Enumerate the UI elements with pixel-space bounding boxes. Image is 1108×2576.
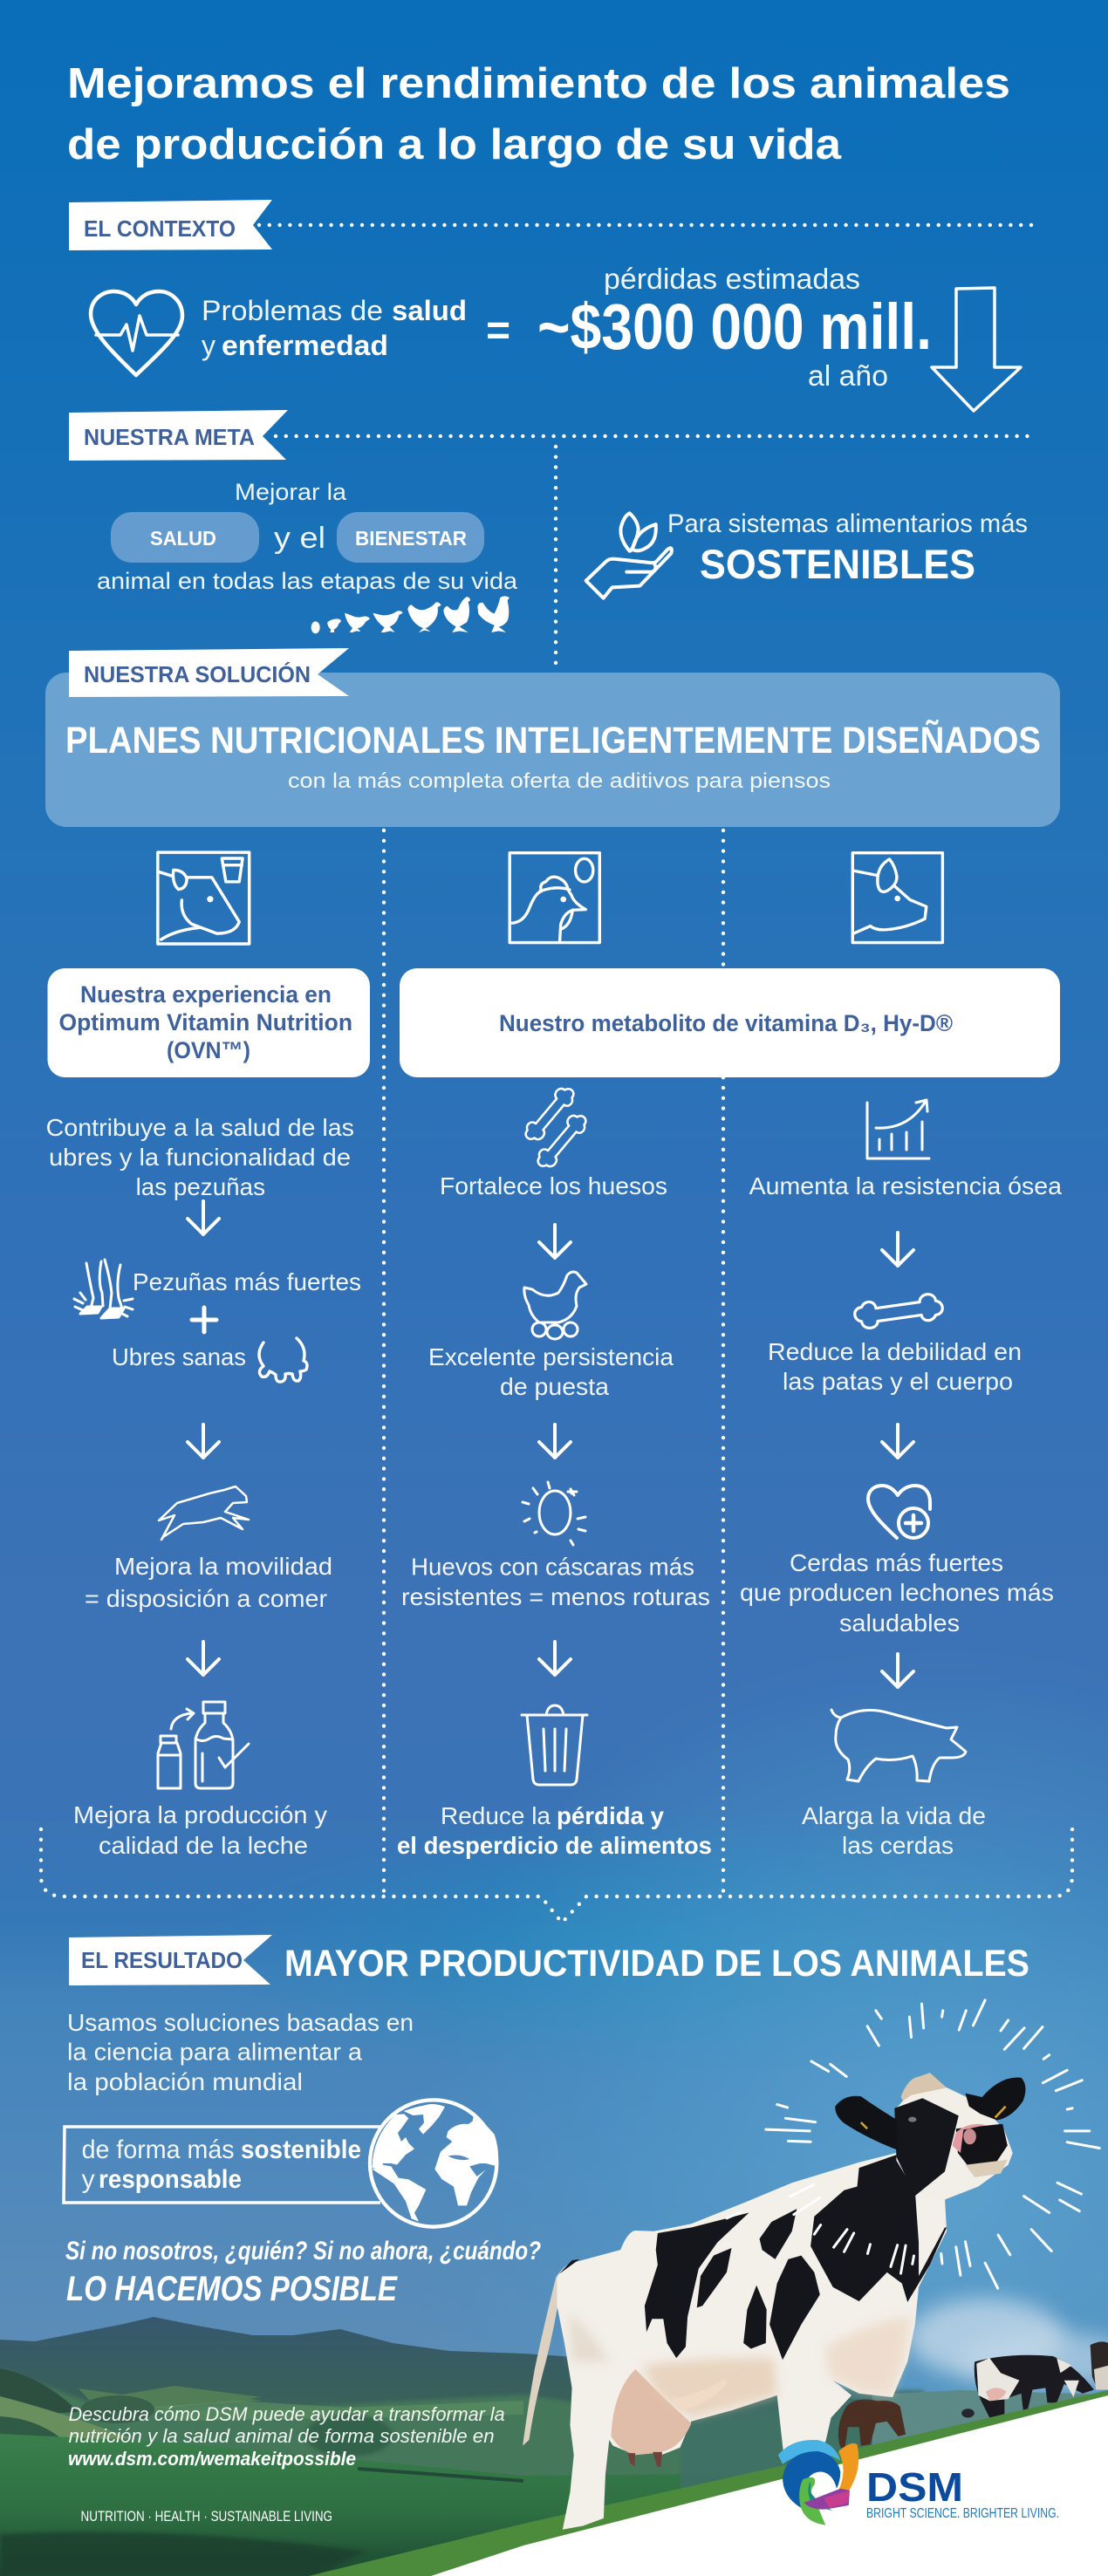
text: descubra: Descubra cómo DSM puede ayudar a transformar la	[69, 2403, 505, 2425]
text: debilidad: las patas y el cuerpo	[783, 1368, 1013, 1395]
arrow	[539, 1642, 571, 1675]
ribbon: nuestra solución: NUESTRA SOLUCIÓN	[84, 661, 311, 687]
DSM logo	[778, 2440, 1059, 2525]
text: reduce la pérdida	[397, 1802, 712, 1859]
text: y el: y el	[274, 522, 325, 555]
title: Mejoramos el rendimiento de los animales	[67, 60, 1010, 107]
section: el resultado	[64, 1935, 1029, 2525]
text: movilidad: Mejora la movilidad	[114, 1553, 332, 1580]
text: huevos: resistentes = menos roturas	[401, 1583, 710, 1610]
cow black patches	[559, 2155, 947, 2360]
icon: cow box	[158, 852, 250, 944]
cow face patch	[894, 2098, 959, 2196]
icon: chicken growth stages	[311, 596, 510, 633]
ribbon: nuestra meta: NUESTRA META	[84, 426, 255, 450]
text: huevos	[401, 1554, 710, 1610]
column 3: pig pathway	[740, 1100, 1062, 1859]
text: mejora la producción: calidad de la leche	[99, 1832, 308, 1859]
icon: milk bottles	[158, 1702, 249, 1788]
text: contribuye: las pezuñas	[136, 1173, 265, 1200]
section: nuestra meta	[69, 410, 1036, 672]
equals: =	[486, 308, 510, 354]
callout: sostenible y responsable: sostenible	[241, 2135, 361, 2164]
ribbon: el resultado: EL RESULTADO	[81, 1949, 243, 1973]
logo tagline: BRIGHT SCIENCE. BRIGHTER LIVING.	[866, 2506, 1059, 2521]
arrow	[188, 1642, 219, 1675]
arrow	[188, 1425, 219, 1458]
text: aumenta: Aumenta la resistencia ósea	[749, 1172, 1062, 1199]
text: alarga: las cerdas	[842, 1832, 954, 1859]
cow tail	[523, 2276, 561, 2446]
white corner	[431, 2395, 1108, 2576]
ribbon: nuestra meta	[69, 410, 288, 461]
arrow	[882, 1654, 913, 1687]
text: usamos soluciones: la ciencia para alimentar a	[67, 2038, 362, 2066]
text: alarga: Alarga la vida de	[802, 1802, 986, 1829]
title: de producción a lo largo de su vida	[67, 121, 842, 168]
icon: hooves	[74, 1260, 133, 1318]
icon: udder	[259, 1338, 307, 1382]
text: problemas de salud: y	[202, 330, 215, 361]
cow right ear	[965, 2077, 1025, 2120]
section: el contexto	[69, 200, 1036, 411]
text: animal en todas las etapas: animal en todas las etapas de su vida	[97, 568, 518, 594]
arrow: large down	[932, 288, 1021, 411]
text: mejora la producción	[73, 1801, 327, 1859]
pill: salud: SALUD	[150, 527, 216, 550]
ribbon: el contexto	[69, 200, 272, 250]
icon: growth chart	[867, 1100, 929, 1158]
pill: bienestar: BIENESTAR	[355, 527, 467, 550]
column 2: hen pathway	[397, 1083, 712, 1859]
sky tint	[393, 1640, 1108, 2425]
text: descubra	[68, 2403, 505, 2470]
text: persistencia	[428, 1343, 674, 1400]
box: ovn: Optimum Vitamin Nutrition	[59, 1009, 352, 1035]
text: lo hacemos posible: LO HACEMOS POSIBLE	[66, 2270, 398, 2308]
arrow	[539, 1425, 571, 1458]
text: cerdas	[740, 1549, 1054, 1636]
box: hy-d: Nuestro metabolito de vitamina D₃, Hy-D®	[499, 1010, 953, 1036]
panel: planes nutricionales	[45, 673, 1060, 827]
cow tuft	[901, 2073, 947, 2101]
box: ovn: Nuestra experiencia en	[80, 981, 332, 1008]
text: huevos: Huevos con cáscaras más	[411, 1554, 694, 1581]
arrow	[539, 1225, 571, 1258]
text: reduce la pérdida: el desperdicio de alimentos	[397, 1832, 712, 1859]
dotted bracket	[41, 1829, 1072, 1923]
text: problemas de salud: salud	[392, 295, 467, 326]
text: alarga	[802, 1802, 986, 1859]
text: usamos soluciones: Usamos soluciones basadas en	[67, 2009, 414, 2036]
text: contribuye: ubres y la funcionalidad de	[49, 1144, 351, 1171]
callout: sostenible y responsable: y	[82, 2165, 95, 2194]
text: movilidad: = disposición a comer	[85, 1585, 327, 1612]
text: problemas de salud: enfermedad	[222, 330, 388, 361]
heading: mayor productividad: MAYOR PRODUCTIVIDAD DE LOS ANIMALES	[284, 1943, 1029, 1985]
callout: sostenible y responsable: de forma más	[82, 2135, 235, 2164]
text: contribuye: Contribuye a la salud de las	[46, 1114, 354, 1141]
text: reduce la pérdida: pérdida y	[557, 1802, 664, 1829]
text: usamos soluciones	[67, 2009, 414, 2095]
text: mejorar la: Mejorar la	[235, 479, 347, 505]
icon: trash can	[522, 1705, 587, 1785]
ribbon: el contexto: EL CONTEXTO	[84, 217, 236, 242]
ribbon: nuestra solución	[69, 648, 349, 697]
subheading: aditivos: con la más completa oferta de aditivos para piensos	[288, 769, 831, 793]
icon: hen box	[510, 853, 599, 943]
pill: bienestar	[337, 512, 484, 563]
text: ubres: Ubres sanas	[112, 1343, 246, 1370]
text: sostenibles: SOSTENIBLES	[700, 541, 975, 587]
text: mejora la producción: Mejora la producción y	[73, 1801, 327, 1828]
icon: hand with leaves	[586, 513, 672, 598]
ribbon: el resultado	[69, 1935, 272, 1985]
arrow	[882, 1233, 913, 1266]
background glow	[174, 1788, 1108, 2120]
text: cerdas: que producen lechones más	[740, 1579, 1054, 1606]
foreground grass strip	[309, 2390, 1108, 2576]
text: pezuñas: Pezuñas más fuertes	[133, 1268, 361, 1295]
cow body	[557, 2153, 947, 2530]
text: persistencia: Excelente persistencia	[428, 1343, 674, 1370]
text: problemas de salud	[202, 295, 467, 361]
text: debilidad	[768, 1338, 1022, 1395]
box: ovn	[47, 968, 370, 1077]
icon: bones	[521, 1083, 591, 1172]
logo swirl	[778, 2440, 858, 2525]
text: al año: al año	[808, 359, 888, 392]
text: descubra: nutrición y la salud animal de forma sostenible en	[69, 2425, 495, 2447]
cow muzzle	[956, 2124, 1008, 2165]
cow photo	[523, 2000, 1099, 2530]
icon: heart plus	[868, 1486, 930, 1538]
pill: salud	[111, 512, 259, 563]
tagline: NUTRITION · HEALTH · SUSTAINABLE LIVING	[80, 2508, 332, 2525]
logo wordmark: DSM	[866, 2464, 963, 2510]
callout: sostenible y responsable	[64, 2127, 380, 2203]
text: movilidad	[85, 1553, 332, 1612]
title	[67, 60, 1010, 168]
distant grazing cows	[838, 2341, 1108, 2449]
column 1: ovn pathway	[46, 1114, 361, 1859]
cow udder	[611, 2369, 691, 2455]
text: para sistemas alimentarios: Para sistemas alimentarios más	[667, 509, 1028, 538]
box: ovn: (OVN™)	[167, 1037, 250, 1063]
figure: 300 000 mill: ~$300 000 mill.	[537, 290, 932, 363]
box: hy-d	[400, 968, 1060, 1077]
text: cerdas: saludables	[839, 1609, 960, 1636]
arrow	[188, 1201, 219, 1234]
callout: sostenible y responsable: responsable	[99, 2165, 242, 2194]
icon: hen on eggs	[524, 1272, 586, 1339]
text: usamos soluciones: la población mundial	[67, 2068, 303, 2095]
column dividers	[384, 830, 723, 1891]
text: persistencia: de puesta	[500, 1373, 609, 1400]
landscape photo	[0, 2299, 1108, 2576]
icon: heart	[91, 291, 182, 375]
text: debilidad: Reduce la debilidad en	[768, 1338, 1022, 1365]
cow left ear	[835, 2096, 898, 2150]
icon: bone	[853, 1292, 944, 1330]
icon: running cow	[159, 1486, 249, 1540]
text: contribuye	[46, 1114, 354, 1200]
icon: shining egg	[523, 1482, 585, 1545]
icon: pig	[831, 1710, 966, 1781]
text: fortalece: Fortalece los huesos	[440, 1172, 667, 1199]
arrow	[882, 1425, 913, 1458]
cow lower body shading	[825, 2317, 911, 2395]
cow impact lines	[727, 2000, 1099, 2288]
cow head	[896, 2087, 1013, 2199]
text: si no nosotros: Si no nosotros, ¿quién? Si no ahora, ¿cuándo?	[65, 2237, 541, 2265]
text: descubra: www.dsm.com/wemakeitpossible	[68, 2448, 356, 2470]
icon: pig box	[852, 853, 942, 943]
text: problemas de salud: Problemas de	[202, 295, 383, 326]
plus	[192, 1308, 216, 1332]
text: reduce la pérdida: Reduce la	[441, 1802, 551, 1829]
icon: globe	[370, 2100, 498, 2227]
text: cerdas: Cerdas más fuertes	[790, 1549, 1003, 1576]
text: pérdidas estimadas: pérdidas estimadas	[604, 263, 860, 295]
